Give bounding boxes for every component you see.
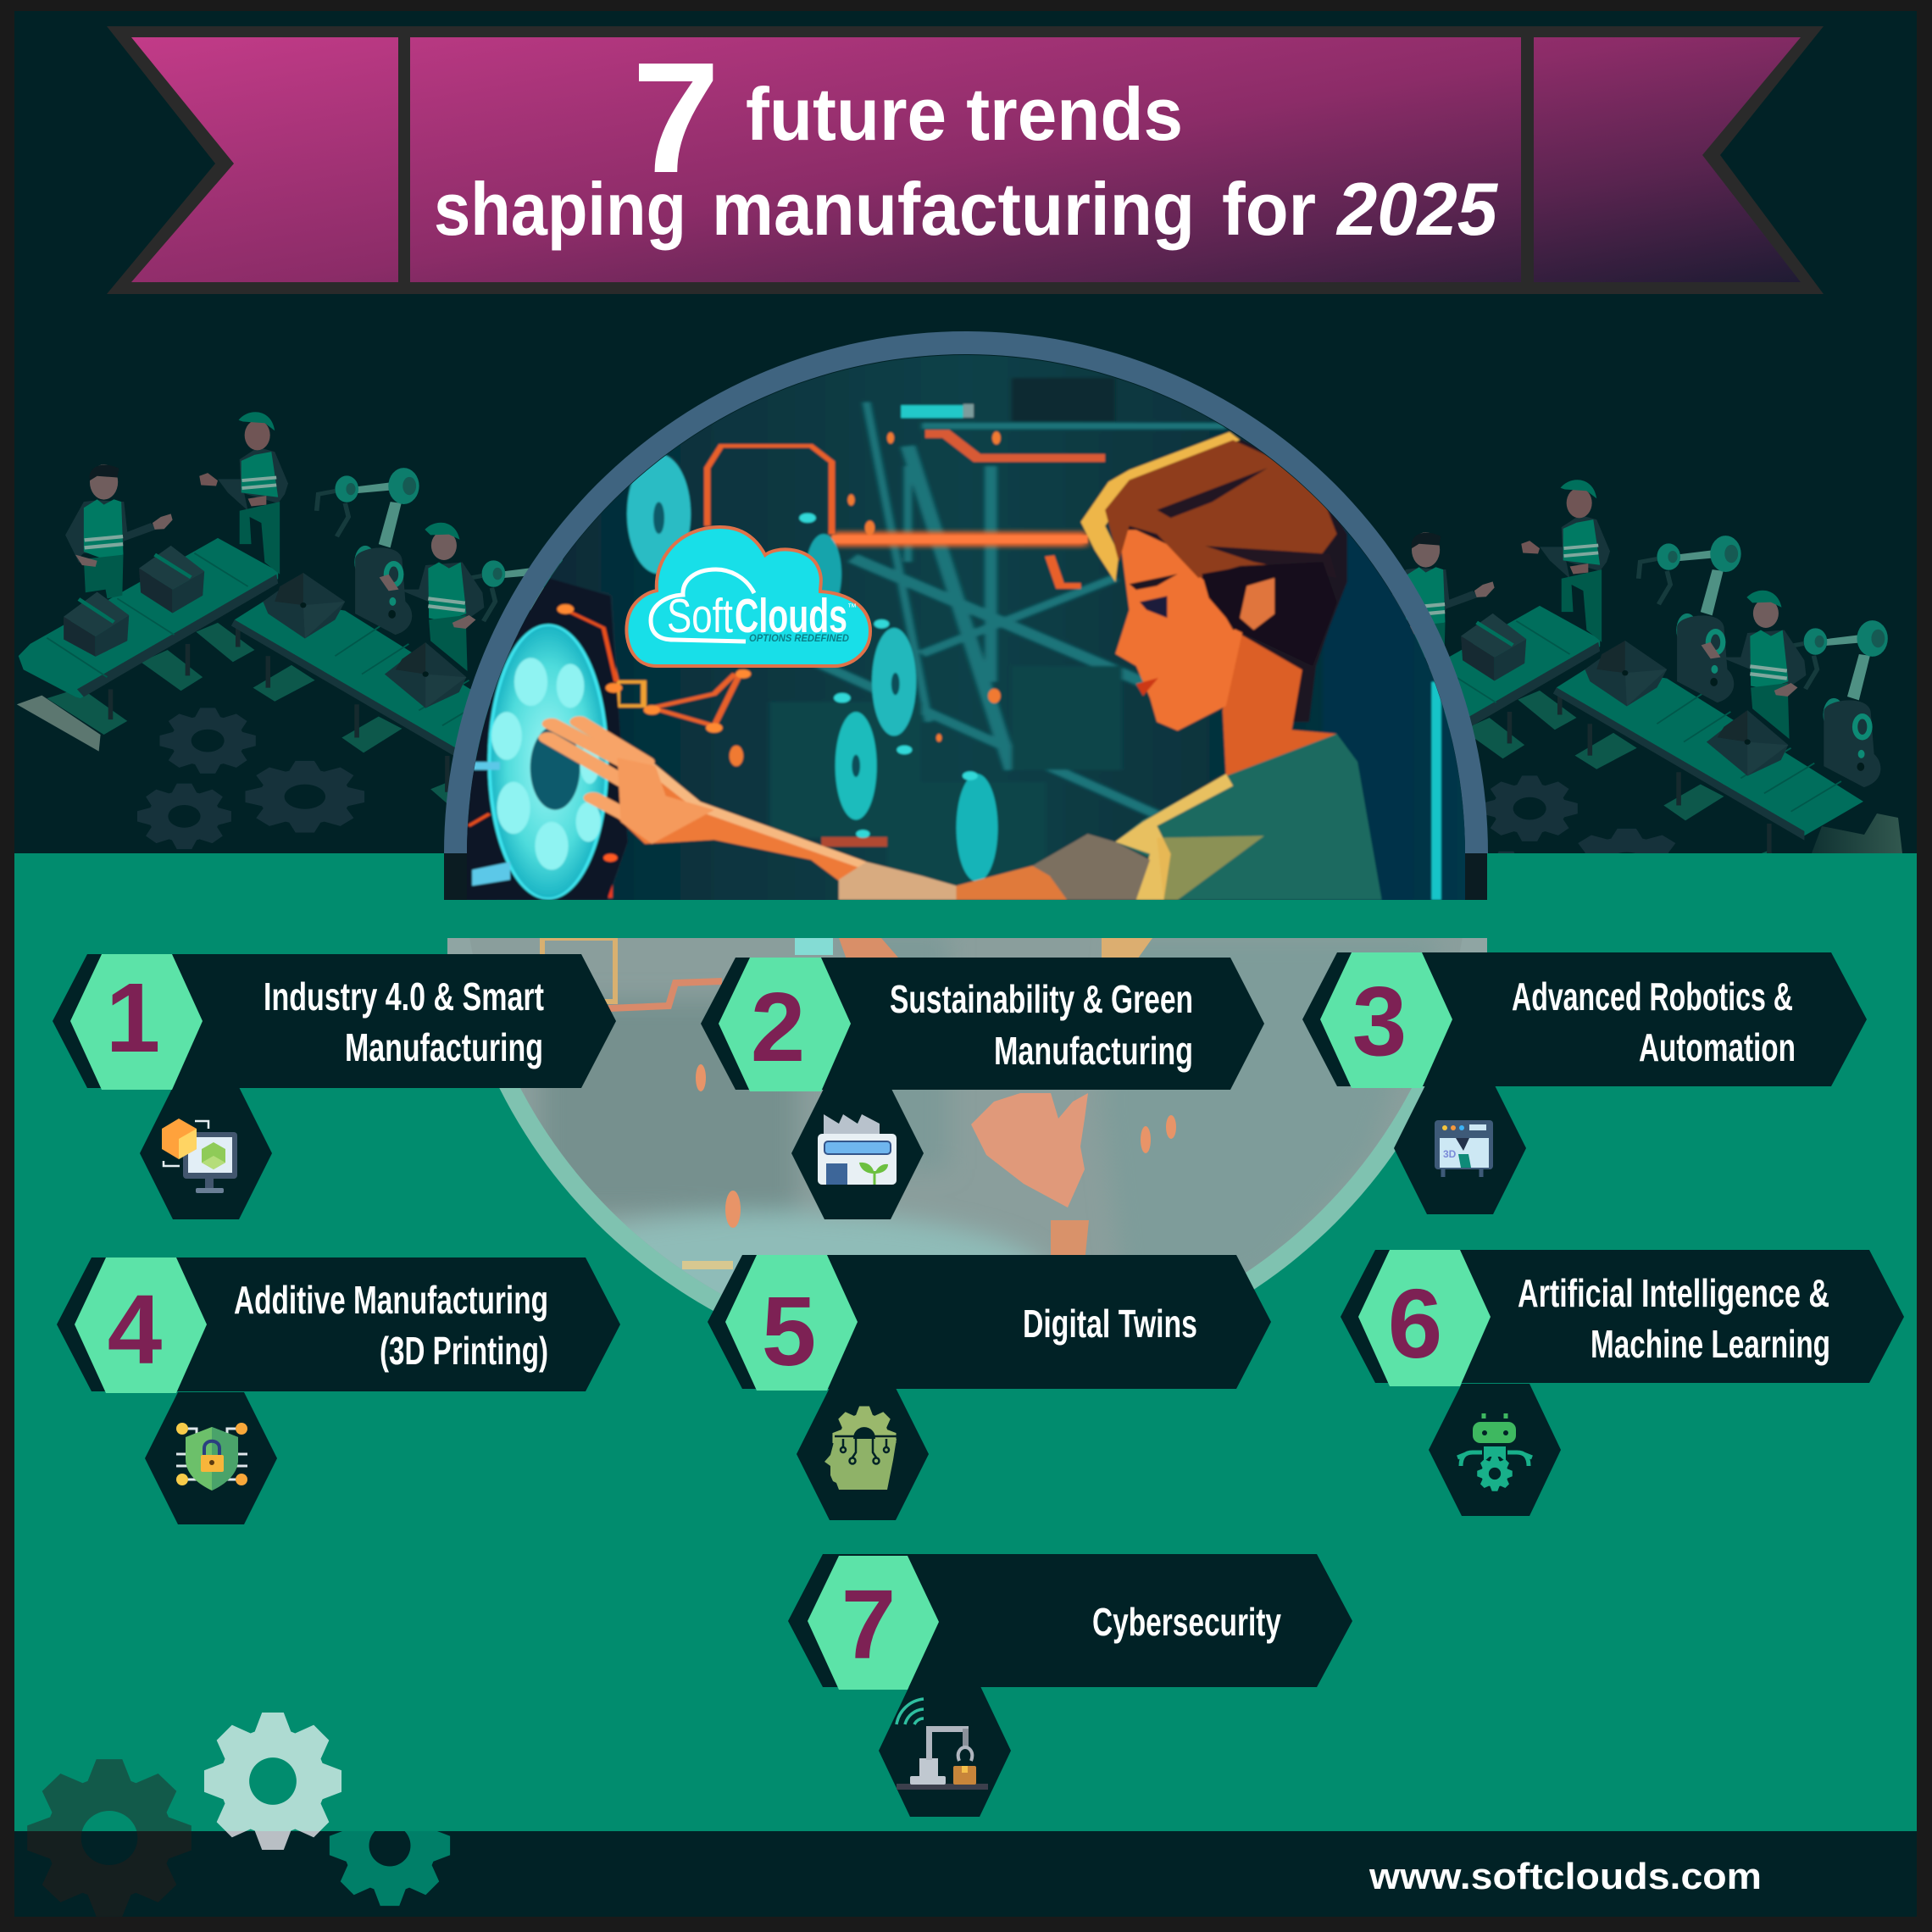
label <box>890 977 1193 1073</box>
icon: cube to monitor <box>162 1119 237 1193</box>
background factory scene, left <box>17 412 566 849</box>
label: Sustainability & Green <box>890 977 1193 1021</box>
icon hexagon <box>791 1087 924 1219</box>
title text: future trends <box>746 72 1183 156</box>
gear: green <box>329 1831 451 1907</box>
band <box>1341 1250 1904 1383</box>
trend 2 <box>701 958 1264 1219</box>
label <box>264 974 544 1069</box>
faded lower half of hero disc <box>447 938 1487 1311</box>
title text: manufacturing <box>712 167 1195 251</box>
icon hexagon <box>797 1388 929 1520</box>
embers <box>727 430 1003 768</box>
gear: pale <box>204 1713 341 1831</box>
gear: pale lower tooth <box>225 1831 320 1850</box>
number hexagon <box>719 958 851 1091</box>
logo: SoftClouds cloud <box>626 527 870 666</box>
label: Additive Manufacturing <box>234 1278 548 1322</box>
band <box>701 958 1264 1090</box>
icon: security shield <box>176 1423 247 1491</box>
title text: 2025 <box>1335 167 1498 251</box>
band <box>1302 952 1867 1086</box>
logo: SoftClouds cloud: Clouds <box>735 589 847 643</box>
label: Artificial Intelligence & <box>1518 1271 1829 1315</box>
band <box>57 1257 620 1391</box>
dark control panel <box>458 578 628 900</box>
label: Automation <box>1639 1025 1796 1069</box>
icon: AI head with gear <box>824 1406 897 1490</box>
hero illustration <box>467 355 1465 900</box>
logo: SoftClouds cloud: ™ <box>847 602 857 613</box>
number: 3 <box>1352 966 1407 1076</box>
number: 4 <box>108 1274 162 1385</box>
number hexagon <box>808 1556 939 1690</box>
trend 5 <box>708 1255 1271 1520</box>
background factory scene, right <box>1339 480 1902 917</box>
icon: robot with gear <box>1457 1413 1532 1491</box>
title text: shaping <box>434 167 686 251</box>
hero arch ring <box>444 331 1488 853</box>
label: Manufacturing <box>345 1025 543 1069</box>
holographic lens <box>472 625 607 898</box>
logo: SoftClouds cloud: Soft <box>667 589 733 643</box>
number: 5 <box>762 1276 816 1386</box>
band <box>53 954 616 1088</box>
number: 2 <box>751 972 805 1082</box>
gear: dark large upper part <box>27 1759 192 1831</box>
label: Manufacturing <box>994 1029 1193 1073</box>
number: 7 <box>841 1569 896 1679</box>
number: 1 <box>106 963 160 1073</box>
number hexagon <box>70 954 203 1090</box>
icon hexagon <box>879 1685 1011 1817</box>
title text: for <box>1222 167 1316 251</box>
cyan lens discs <box>627 454 998 882</box>
number hexagon <box>1358 1250 1491 1386</box>
machinery backdrop <box>769 378 1413 902</box>
icon: 3D printer: 3D <box>1443 1148 1457 1160</box>
trend 6 <box>1341 1250 1904 1516</box>
label: Advanced Robotics & <box>1512 974 1793 1019</box>
number hexagon <box>1320 952 1452 1088</box>
icon: green factory <box>818 1114 897 1185</box>
circuit traces <box>562 434 1105 898</box>
label: (3D Printing) <box>380 1329 548 1373</box>
label <box>234 1278 548 1373</box>
gear: dark large lower part <box>27 1831 192 1917</box>
number: 6 <box>1388 1269 1442 1379</box>
title banner <box>107 26 1824 294</box>
number hexagon <box>725 1255 858 1391</box>
icon hexagon <box>145 1392 277 1524</box>
icon hexagon <box>140 1087 272 1219</box>
trend 4 <box>57 1257 620 1524</box>
hero base strip <box>444 853 1487 900</box>
label: Machine Learning <box>1591 1322 1830 1366</box>
title text: 7 <box>632 31 719 206</box>
website: www.softclouds.com <box>1368 1856 1762 1897</box>
trend 7 <box>788 1554 1352 1817</box>
green panel <box>14 853 1917 1831</box>
label: Cybersecurity <box>1092 1600 1281 1644</box>
logo: SoftClouds cloud: OPTIONS REDEFINED <box>749 632 849 644</box>
icon hexagon <box>1429 1384 1561 1516</box>
band <box>788 1554 1352 1687</box>
label <box>1518 1271 1830 1366</box>
band <box>708 1255 1271 1389</box>
icon: robot arm with wifi <box>897 1699 988 1790</box>
label: Digital Twins <box>1023 1302 1197 1346</box>
woman <box>548 432 1382 900</box>
icon: 3D printer <box>1435 1120 1493 1177</box>
label: Industry 4.0 & Smart <box>264 974 544 1019</box>
trend 3 <box>1302 952 1867 1214</box>
number hexagon <box>75 1257 207 1393</box>
title text <box>434 31 1498 251</box>
icon hexagon <box>1394 1082 1526 1214</box>
trend 1 <box>53 954 616 1219</box>
label <box>1512 974 1796 1069</box>
